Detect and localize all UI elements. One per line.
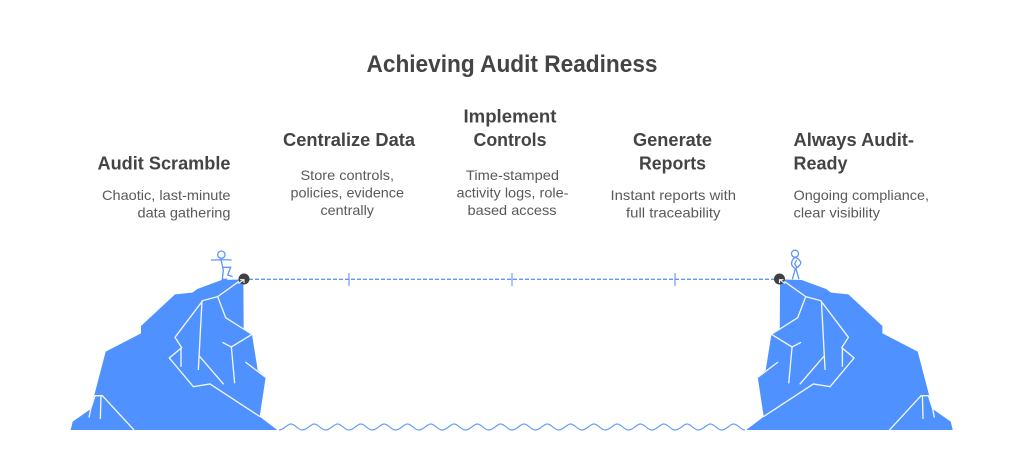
text block: Centralize Data: Centralize Data xyxy=(283,130,416,150)
text block: Generate Reports xyxy=(610,130,736,220)
text block: Implement Controls: Implement xyxy=(464,106,556,126)
left cliff xyxy=(71,279,277,430)
text block: Generate Reports: full traceability xyxy=(626,204,720,220)
text block: Implement Controls: based access xyxy=(468,202,556,218)
text block: Implement Controls: Controls xyxy=(474,130,546,150)
text block: Audit Scramble: Chaotic, last-minute xyxy=(102,187,231,203)
text block: Always Audit-Ready: clear visibility xyxy=(794,204,880,220)
text block: Implement Controls xyxy=(456,106,569,218)
left start marker xyxy=(238,274,250,284)
text block: Always Audit-Ready: Ongoing compliance, xyxy=(794,187,929,203)
text block: Generate Reports: Instant reports with xyxy=(610,187,736,203)
text block: Always Audit-Ready xyxy=(794,130,929,220)
text block: Always Audit-Ready: Ready xyxy=(794,154,848,174)
icon: balancing figure on left cliff xyxy=(211,251,233,279)
icon: standing figure on right cliff xyxy=(791,250,801,279)
text block: Audit Scramble xyxy=(98,154,231,220)
text block: Centralize Data xyxy=(283,130,416,218)
right end marker xyxy=(774,274,785,284)
text block: Generate Reports: Generate xyxy=(633,130,712,150)
text block: Implement Controls: activity logs, role- xyxy=(456,184,569,200)
text block: Centralize Data: Store controls, xyxy=(300,167,394,183)
text block: Implement Controls: Time-stamped xyxy=(466,167,559,183)
title: Achieving Audit Readiness xyxy=(366,51,658,78)
text block: Always Audit-Ready: Always Audit- xyxy=(794,130,914,150)
text block: Generate Reports: Reports xyxy=(639,154,706,174)
right cliff xyxy=(746,279,953,430)
text block: Centralize Data: centrally xyxy=(320,202,374,218)
text block: Audit Scramble: data gathering xyxy=(138,204,230,220)
water waves xyxy=(279,424,745,430)
text block: Centralize Data: policies, evidence xyxy=(290,184,404,200)
text block: Audit Scramble: Audit Scramble xyxy=(98,154,230,174)
dashed progress line with milestone ticks xyxy=(249,273,775,286)
